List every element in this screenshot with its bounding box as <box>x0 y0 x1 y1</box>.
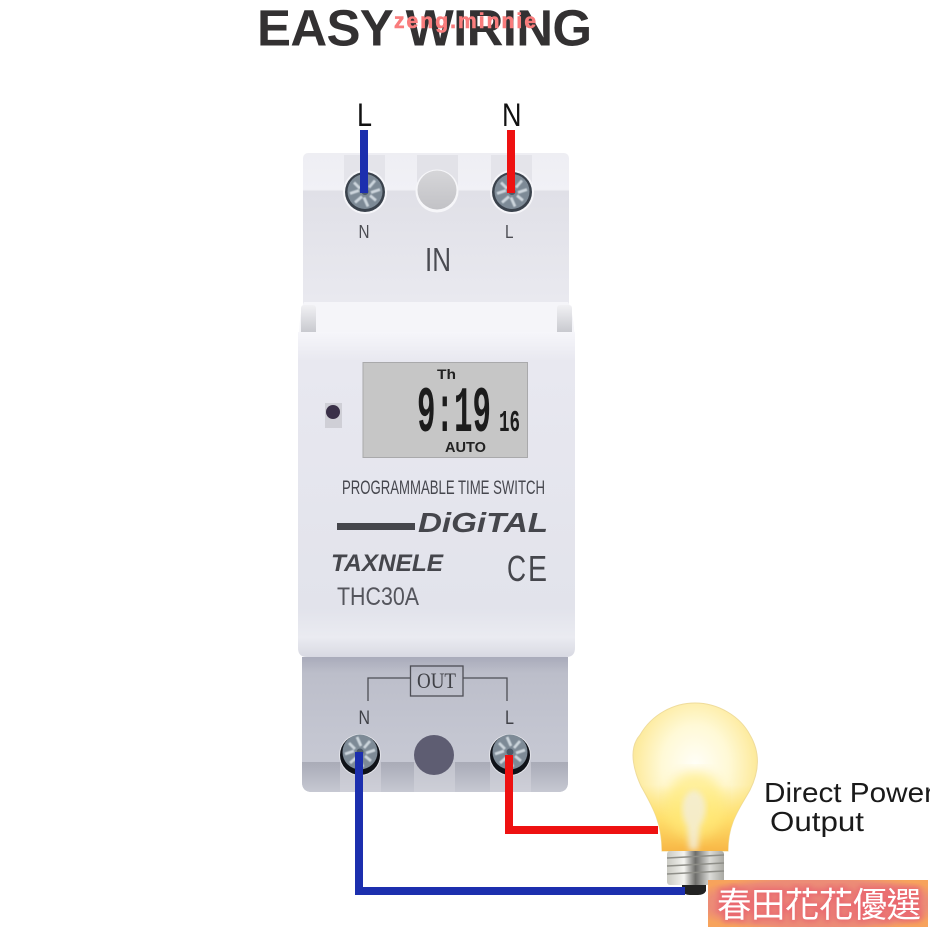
icon: output screw N <box>339 734 381 776</box>
device: bottom output section <box>302 657 568 792</box>
CE mark: E <box>528 548 547 589</box>
model number: THC30A <box>337 583 419 611</box>
caption: direct power output <box>764 777 930 837</box>
label: terminal L: L <box>505 222 514 242</box>
icon: indicator LED <box>325 403 342 428</box>
caption: direct power output: Output <box>770 806 864 837</box>
CE mark <box>507 548 547 589</box>
label: L: L <box>357 97 372 133</box>
bulb filament <box>682 790 706 850</box>
LCD display: 9:19 <box>417 377 491 451</box>
brand name: TAXNELE <box>331 550 444 577</box>
LCD display <box>363 362 528 458</box>
OUT bracket: OUT <box>417 668 456 693</box>
OUT bracket <box>368 666 507 701</box>
device: top input section <box>303 153 569 323</box>
label: output N: N <box>358 708 370 729</box>
icon: input screw L <box>490 170 534 214</box>
caption: direct power output: Direct Power <box>764 777 930 808</box>
icon: centre hole <box>414 735 454 775</box>
terminal channels <box>340 762 531 792</box>
label: N: N <box>502 97 522 133</box>
wire: input live <box>360 130 368 193</box>
wire: input neutral <box>507 130 515 193</box>
product description: PROGRAMMABLE TIME SWITCH <box>342 477 545 499</box>
watermark: zeng.minnie: zeng.minnie <box>394 10 536 33</box>
label: output L: L <box>505 708 514 729</box>
icon: input screw N <box>343 170 387 214</box>
label: terminal N: N <box>358 222 370 242</box>
icon: light bulb <box>630 703 760 895</box>
bulb screw base <box>667 851 724 895</box>
watermark badge: 春田花花優選 <box>717 887 921 925</box>
label: IN: IN <box>425 241 451 278</box>
icon: output screw L <box>489 734 531 776</box>
title: EASY WIRING <box>257 0 592 56</box>
wire: output to bulb, red <box>509 755 658 830</box>
watermark badge: 春田花花優選 <box>717 887 921 925</box>
bulb inner glow <box>644 764 750 851</box>
digital logo <box>337 507 548 538</box>
LCD mode: AUTO <box>445 440 486 456</box>
wiring diagram <box>260 10 930 927</box>
terminal channels <box>344 155 532 190</box>
device: main panel <box>298 332 575 657</box>
device: hinge cover <box>299 302 575 345</box>
icon: centre hole <box>416 170 458 212</box>
CE mark: C <box>507 548 526 589</box>
wire: output to bulb, blue <box>359 752 685 891</box>
LCD day: Th <box>437 366 456 382</box>
digital logo: DiGiTAL <box>418 507 548 538</box>
LCD seconds: 16 <box>499 406 520 441</box>
